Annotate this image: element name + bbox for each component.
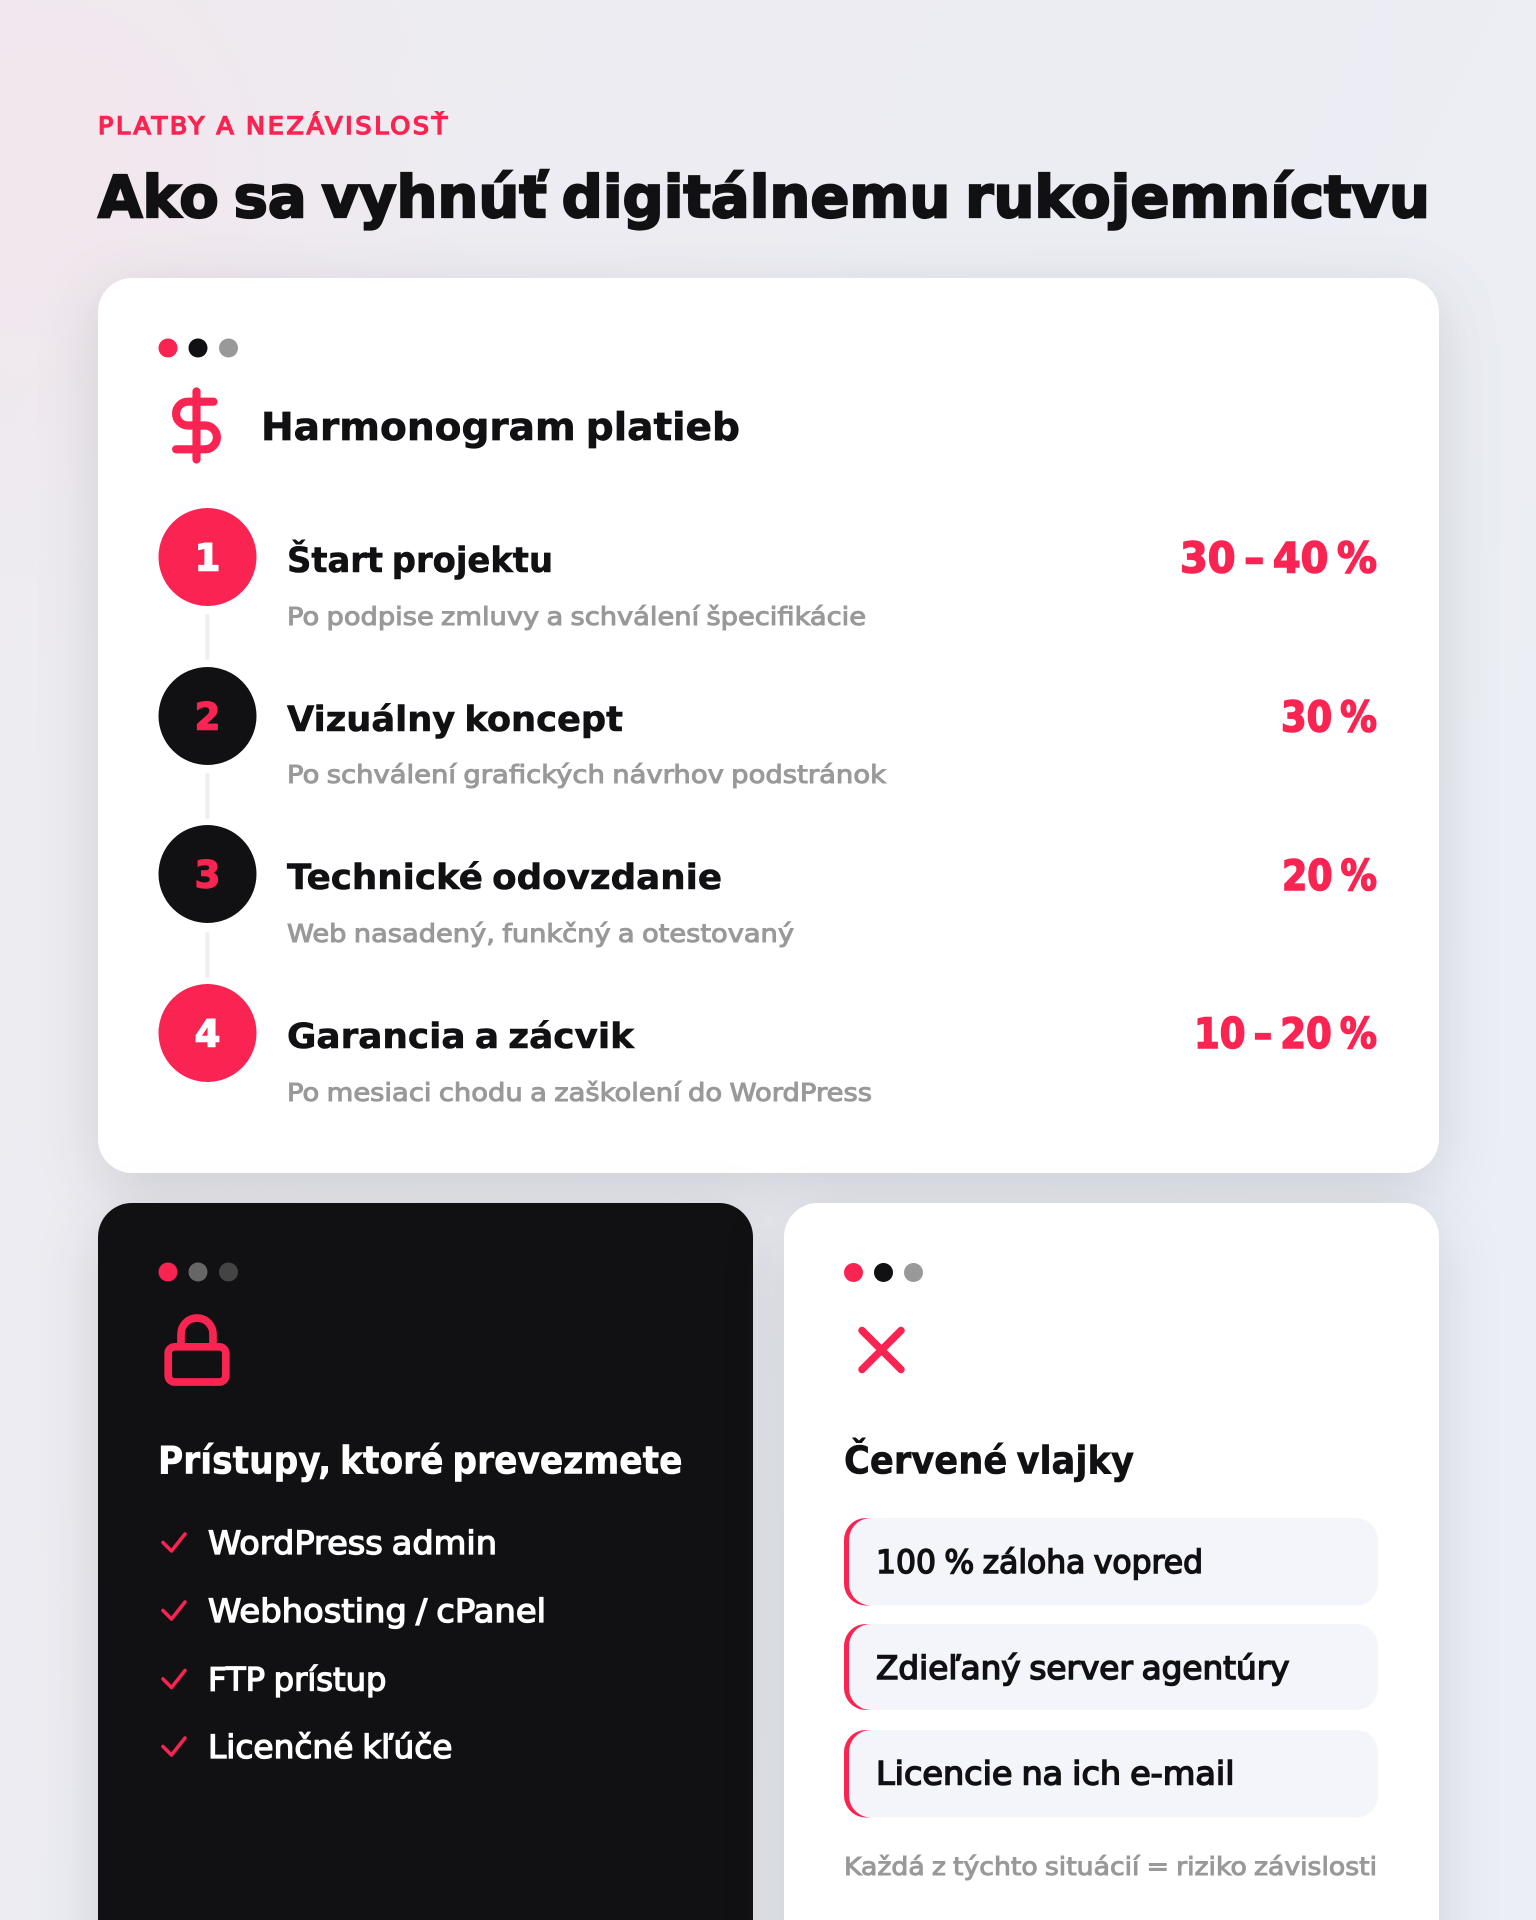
window dots bbox=[844, 1263, 923, 1282]
step 3: Web nasadený, funkčný a otestovaný bbox=[287, 919, 794, 948]
checklist: Licenčné kľúče bbox=[208, 1728, 452, 1766]
step 2: 30 % bbox=[1281, 692, 1377, 742]
flag: licences on their email bbox=[844, 1730, 1378, 1818]
eyebrow label: PLATBY A NEZÁVISLOSŤ bbox=[98, 111, 450, 140]
panel: accesses to take over bbox=[98, 1203, 753, 1920]
step 4: Po mesiaci chodu a zaškolení do WordPress bbox=[287, 1078, 872, 1107]
step 1: 1 bbox=[195, 536, 220, 580]
icon: cross bbox=[862, 1330, 901, 1370]
flag: full upfront payment: 100 % záloha vopred bbox=[876, 1543, 1203, 1581]
flag: licences on their email: Licencie na ich e-mail bbox=[876, 1754, 1234, 1792]
checklist: WordPress admin bbox=[208, 1524, 497, 1562]
flag: shared agency server bbox=[844, 1624, 1378, 1710]
step 3: 3 bbox=[195, 854, 220, 896]
icon: dollar sign bbox=[176, 392, 217, 460]
step 4 bbox=[158, 984, 1377, 1107]
checklist: Webhosting / cPanel bbox=[208, 1592, 546, 1630]
checklist: FTP prístup bbox=[208, 1660, 386, 1698]
step 4: 4 bbox=[195, 1012, 220, 1056]
step 3 bbox=[158, 825, 1377, 948]
timeline connectors bbox=[206, 614, 210, 978]
flag: full upfront payment bbox=[844, 1518, 1378, 1606]
checklist bbox=[163, 1524, 546, 1766]
panel: payment schedule bbox=[98, 278, 1439, 1173]
step 4: Garancia a zácvik bbox=[287, 1017, 635, 1057]
flag: shared agency server: Zdieľaný server agentúry bbox=[876, 1649, 1290, 1687]
panel: red flags bbox=[784, 1203, 1439, 1920]
step 1: Po podpise zmluvy a schválení špecifikácie bbox=[287, 602, 866, 631]
window dots bbox=[158, 338, 238, 358]
step 2: Po schválení grafických návrhov podstránok bbox=[287, 760, 887, 789]
panel heading: Prístupy, ktoré prevezmete bbox=[158, 1438, 682, 1484]
panel heading: Červené vlajky bbox=[844, 1436, 1134, 1484]
step 2 bbox=[158, 667, 1377, 789]
icon: lock bbox=[168, 1318, 226, 1382]
step 3: 20 % bbox=[1282, 851, 1377, 900]
step 1 bbox=[158, 508, 1377, 631]
step 4: 10 – 20 % bbox=[1194, 1009, 1377, 1058]
window dots bbox=[158, 1262, 238, 1282]
panel heading: Harmonogram platieb bbox=[261, 405, 740, 450]
step 1: 30 – 40 % bbox=[1180, 534, 1377, 582]
step 3: Technické odovzdanie bbox=[287, 858, 722, 898]
footnote: Každá z týchto situácií = riziko závislosti bbox=[844, 1852, 1377, 1881]
step 1: Štart projektu bbox=[287, 540, 553, 581]
title: Ako sa vyhnúť digitálnemu rukojemníctvu bbox=[98, 163, 1430, 231]
step 2: 2 bbox=[195, 696, 220, 738]
step 2: Vizuálny koncept bbox=[287, 700, 623, 740]
